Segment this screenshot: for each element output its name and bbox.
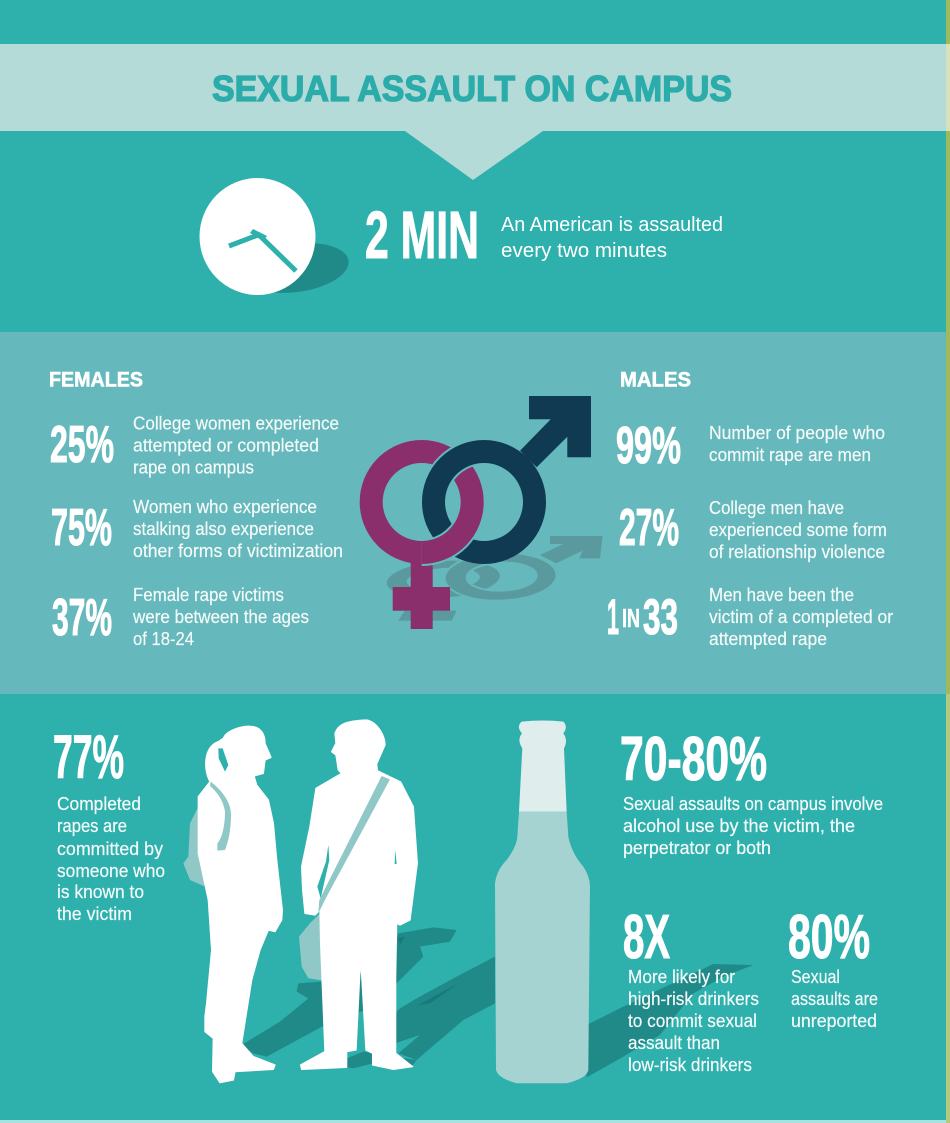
stat: 37%: of 18-24	[133, 629, 194, 649]
stat: 25%: rape on campus	[133, 458, 254, 478]
stat: 2 min	[365, 198, 723, 273]
stat description	[501, 214, 723, 262]
bottle liquid	[495, 812, 590, 1083]
stat: 2 min: 2 MIN	[365, 198, 479, 273]
stat: 8x: high-risk drinkers	[628, 989, 759, 1009]
messenger bag	[299, 913, 363, 981]
illustration: female student	[183, 726, 282, 1083]
stat: 99%: 99%	[616, 417, 681, 475]
stat: 27%: College men have	[709, 498, 844, 518]
shadow: bottle on right	[587, 964, 753, 1077]
stat: 37%: were between the ages	[132, 607, 309, 627]
stat: 1 in 33	[607, 585, 893, 649]
stat: 25%: College women experience	[133, 414, 339, 434]
bag strap	[318, 776, 390, 913]
stat: 27%: experienced some form	[709, 520, 887, 540]
shadows: people and bottle	[242, 927, 495, 1068]
title banner	[0, 44, 946, 180]
illustration: bottle	[495, 720, 590, 1083]
stat: 8x	[623, 903, 759, 1075]
female ring overlap	[422, 502, 472, 552]
stat: 99%: commit rape are men	[709, 445, 871, 465]
stat: 80%: 80%	[788, 903, 870, 972]
symbol shadows	[386, 536, 603, 621]
illustration: male student	[299, 720, 417, 1069]
bottom edge strip	[0, 1120, 946, 1123]
stat: 77%: is known to	[57, 882, 144, 902]
stat: 8x: assault than	[628, 1033, 720, 1053]
stat: 27%: of relationship violence	[709, 542, 885, 562]
stat: 27%	[619, 498, 887, 562]
stat: 1 in 33: Men have been the	[709, 585, 854, 605]
hair gap	[218, 748, 228, 772]
icon: clock	[200, 178, 352, 299]
stat: 77%: 77%	[53, 723, 124, 791]
stat: 25%: 25%	[50, 416, 114, 474]
silhouette	[301, 720, 417, 1069]
heading: females: FEMALES	[49, 368, 143, 392]
stat: 8x: More likely for	[628, 967, 735, 987]
stat: 75%	[51, 497, 343, 561]
stat: 80%: Sexual	[791, 967, 840, 987]
stat: 77%: committed by	[57, 839, 163, 859]
stat: 80%	[788, 903, 878, 1031]
stat: 77%: the victim	[57, 904, 132, 924]
female symbol	[371, 452, 472, 629]
stat: 77%: Completed	[57, 794, 141, 814]
stat: 80%: assaults are	[791, 989, 878, 1009]
stat: 75%: stalking also experience	[133, 519, 314, 539]
stat: 8x: low-risk drinkers	[628, 1055, 752, 1075]
backpack	[183, 807, 207, 887]
stat: 1 in 33: 33	[643, 589, 678, 645]
stat: 77%	[53, 723, 165, 924]
stat: 25%	[50, 414, 339, 478]
stat: 27%: 27%	[619, 499, 679, 557]
stat description: every two minutes	[501, 240, 667, 262]
stat: 1 in 33: attempted rape	[709, 629, 827, 649]
stat: 1 in 33: victim of a completed or	[709, 607, 893, 627]
stat: 70-80%: alcohol use by the victim, the	[623, 816, 855, 836]
stat: 1 in 33: 1	[607, 589, 619, 645]
stat: 70-80%	[620, 725, 883, 858]
panel: gender statistics	[0, 332, 946, 694]
stat description: An American is assaulted	[501, 214, 723, 236]
icon: gender symbols	[371, 396, 603, 629]
right edge strip	[946, 0, 950, 1123]
stat: 77%: rapes are	[57, 816, 127, 836]
heading: males: MALES	[620, 368, 691, 392]
stat: 99%: Number of people who	[709, 423, 885, 443]
stat: 80%: unreported	[791, 1011, 877, 1031]
backpack strap	[210, 782, 231, 851]
stat: 75%: 75%	[51, 499, 112, 557]
stat: 70-80%: 70-80%	[620, 725, 767, 794]
stat: 8x: to commit sexual	[628, 1011, 757, 1031]
stat: 37%: Female rape victims	[133, 585, 284, 605]
male symbol	[433, 396, 591, 552]
stat: 70-80%: Sexual assaults on campus involve	[623, 794, 883, 814]
stat: 70-80%: perpetrator or both	[623, 838, 771, 858]
stat: 99%	[616, 417, 885, 475]
bottle neck	[519, 720, 567, 812]
pocket line	[395, 850, 397, 864]
stat: 8x: 8X	[623, 903, 670, 972]
stat: 37%	[52, 585, 309, 649]
title: SEXUAL ASSAULT ON CAMPUS	[212, 68, 732, 109]
stat: 77%: someone who	[57, 861, 165, 881]
silhouette	[198, 726, 282, 1083]
stat: 75%: other forms of victimization	[133, 541, 343, 561]
stat: 1 in 33: IN	[622, 603, 640, 633]
arm gap	[317, 845, 329, 898]
stat: 37%: 37%	[52, 589, 112, 647]
stat: 75%: Women who experience	[133, 497, 317, 517]
stat: 25%: attempted or completed	[133, 436, 319, 456]
